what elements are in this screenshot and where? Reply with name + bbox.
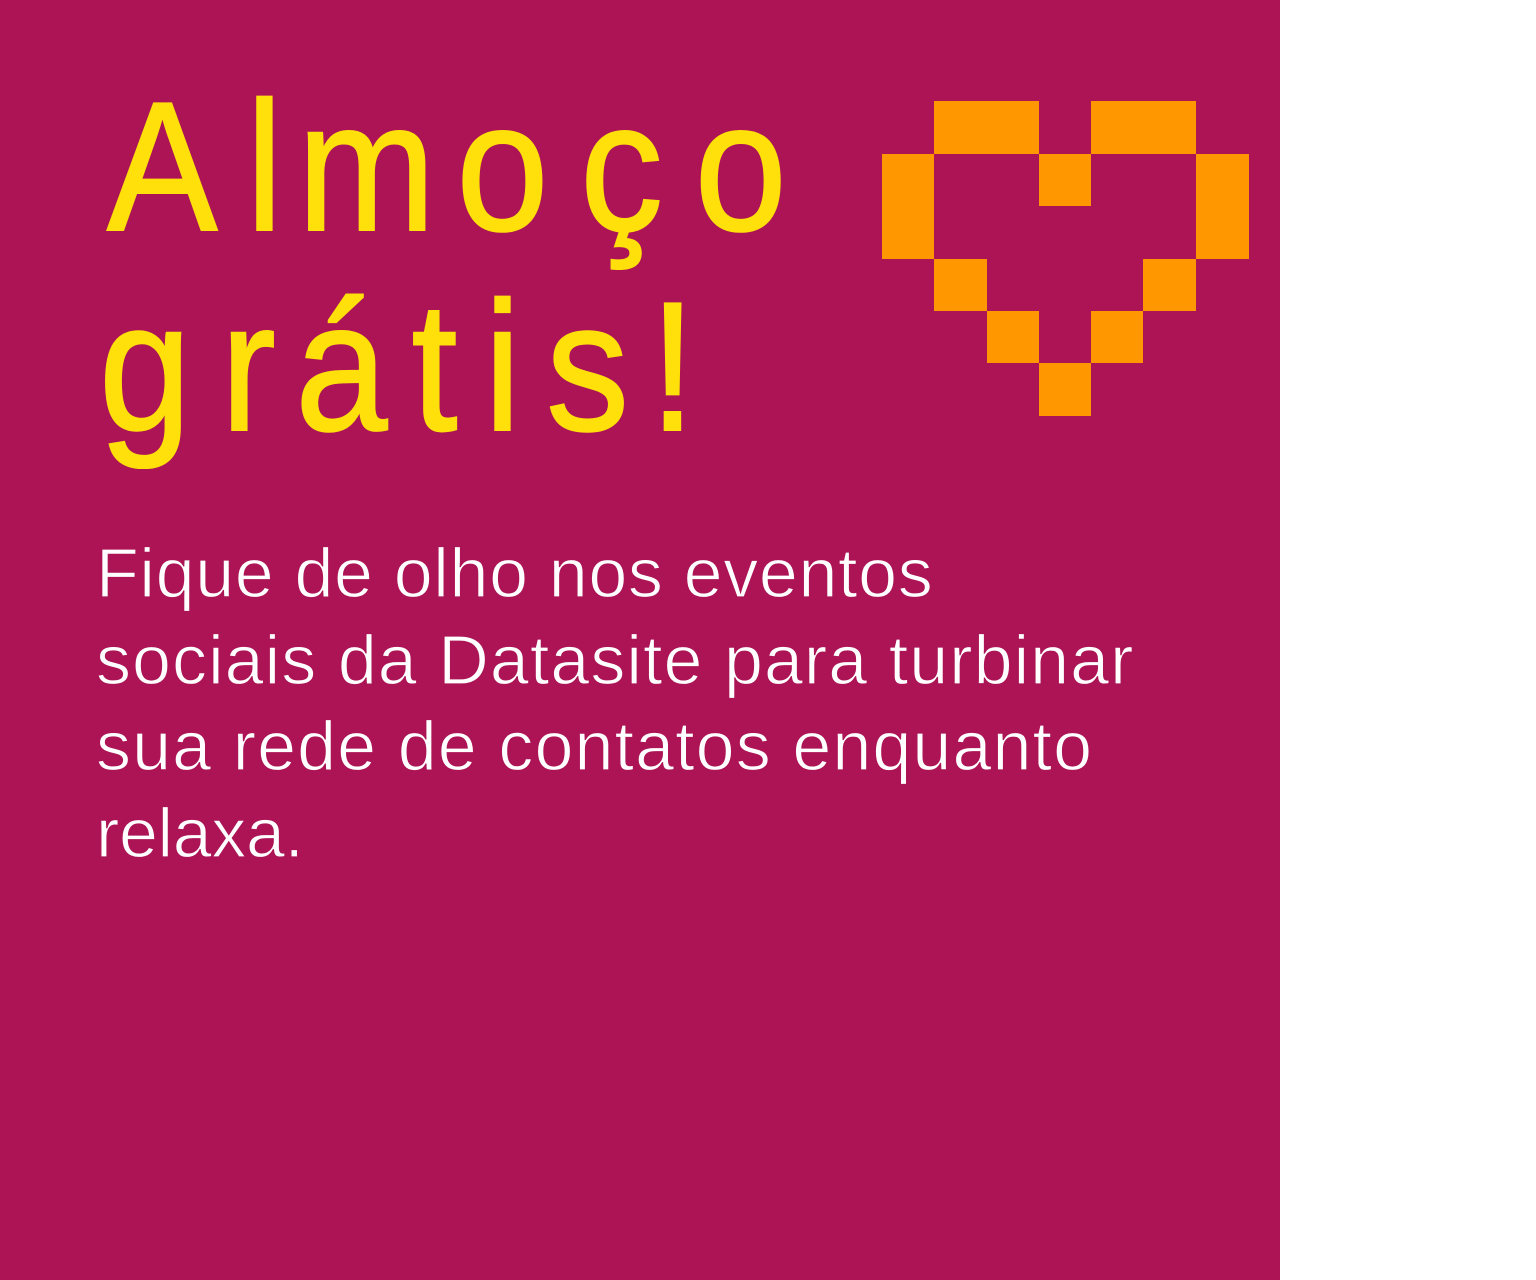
text block: body copy <box>96 534 1135 872</box>
text block: body copy: relaxa. <box>96 794 304 872</box>
title line 2: grátis! <box>99 263 696 469</box>
text block: body copy: Fique de olho nos eventos <box>96 534 933 612</box>
icon: pixel heart <box>882 101 1249 416</box>
title <box>99 63 787 469</box>
title line 1: Almoço <box>107 63 787 269</box>
text block: body copy: sua rede de contatos enquanto <box>96 707 1093 785</box>
text block: body copy: sociais da Datasite para turbinar <box>96 621 1135 699</box>
